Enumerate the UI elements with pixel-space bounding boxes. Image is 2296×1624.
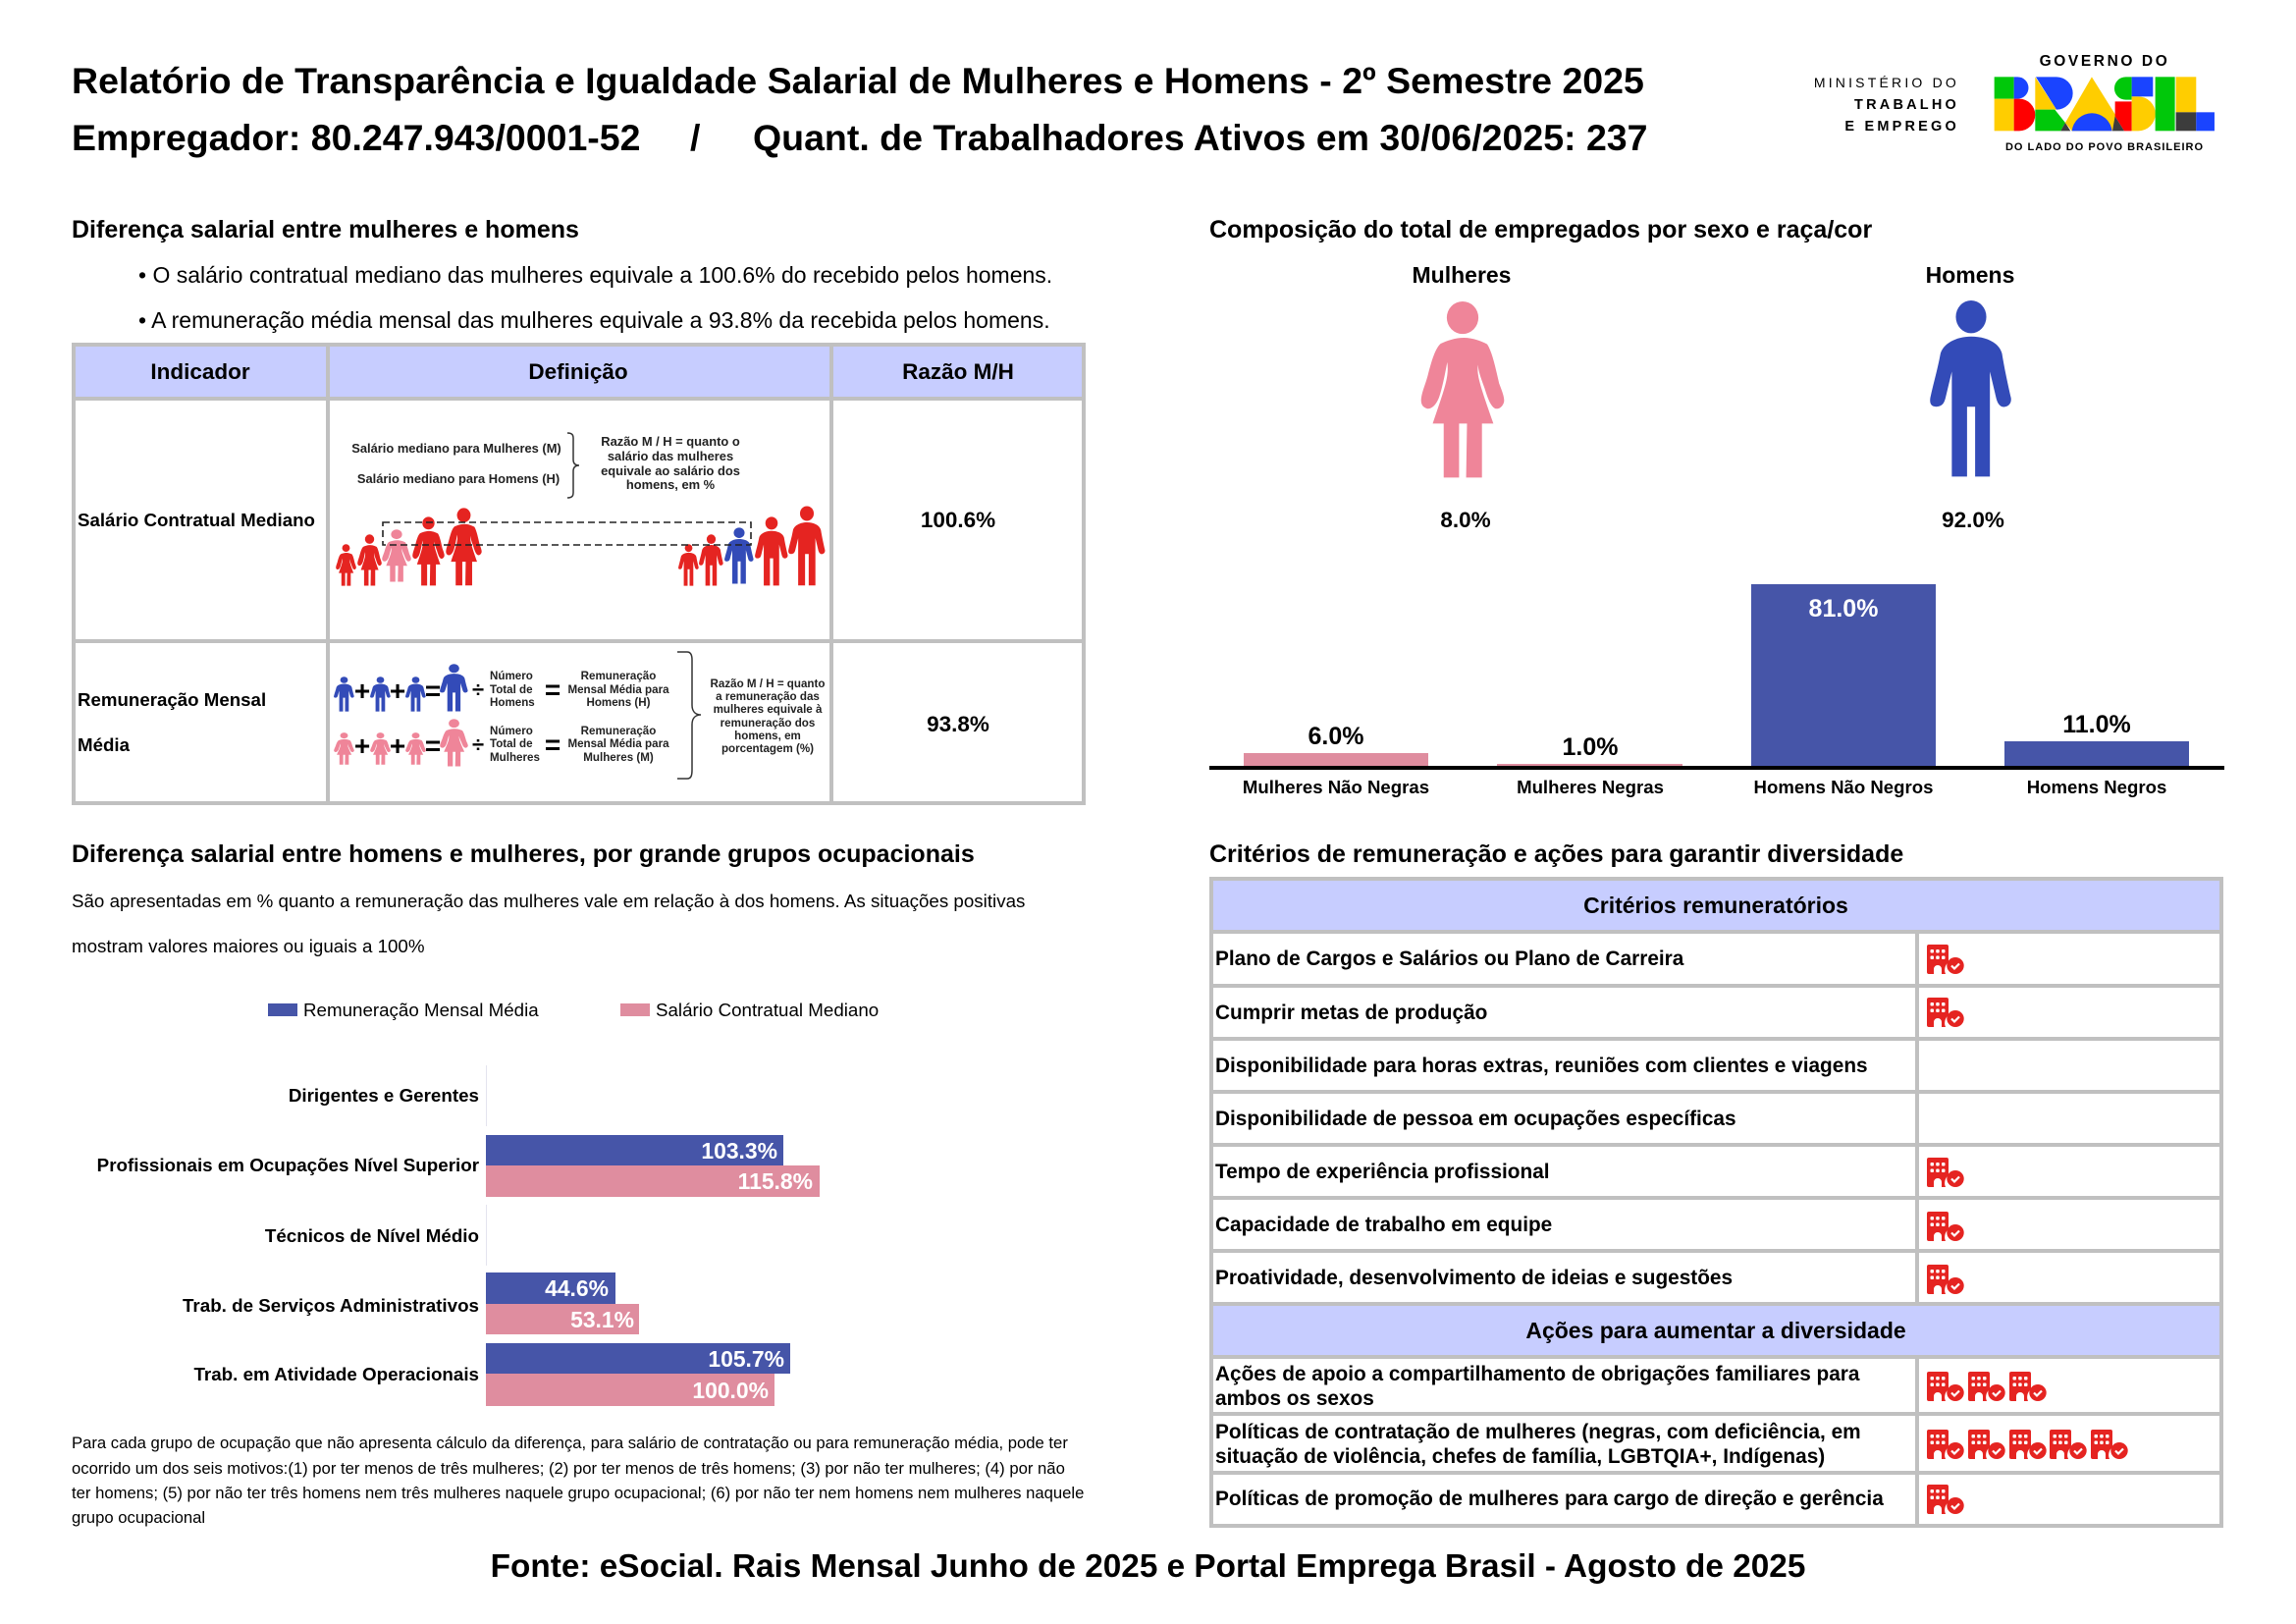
criteria labels: Cumprir metas de produção [1215, 1001, 1487, 1024]
diagram: average pay: = [545, 675, 561, 705]
bar chart: occupational groups: 115.8% [738, 1168, 813, 1194]
bar chart: occupational groups: 44.6% [545, 1275, 609, 1301]
text block: occupational intro: São apresentadas em % quanto a remuneração das mulheres vale em relação à dos homens. As situações positivas [72, 891, 1025, 911]
text block: footnote: ter homens; (5) por não ter três homens nem três mulheres naquele grupo ocupacional; (6) por não ter nem homens nem mulheres naquele [72, 1484, 1084, 1502]
diagram: average pay: + [390, 731, 405, 761]
table header: actions: Ações para aumentar a diversidade [1525, 1318, 1906, 1343]
logo: Governo do Brasil: DO LADO DO POVO BRASILEIRO [2005, 141, 2204, 153]
row labels: Salário Contratual Mediano [78, 510, 315, 530]
bar chart: occupational groups: Trab. de Serviços Administrativos [183, 1295, 479, 1316]
logo: Ministério do Trabalho e Emprego [1814, 75, 1959, 135]
diagram: average pay: Remuneração [581, 670, 656, 682]
text block: occupational intro [72, 891, 1025, 956]
heading: criteria: Critérios de remuneração e ações para garantir diversidade [1209, 840, 1903, 868]
text block: salary bullets [138, 262, 1052, 333]
diagram: average pay: = [425, 731, 441, 761]
logo: Ministério do Trabalho e Emprego: TRABALHO [1854, 97, 1959, 113]
row values: 100.6% [921, 508, 995, 532]
logo: Ministério do Trabalho e Emprego: MINISTÉRIO DO [1814, 75, 1959, 90]
heading: salary difference: Diferença salarial entre mulheres e homens [72, 216, 579, 244]
panel: women share [1413, 262, 1511, 532]
diagram: average pay: mulheres equivale à [714, 703, 823, 716]
panel: men share: Homens [1926, 262, 2014, 288]
criteria labels [1215, 947, 1868, 1289]
diagram: average pay: Total de [490, 683, 533, 696]
diagram: average pay: + [354, 676, 370, 706]
legend: Remuneração Mensal Média [303, 1000, 539, 1020]
bar chart: composition by sex and race: 11.0% [2062, 711, 2131, 738]
diagram: average pay: Mulheres (M) [583, 751, 654, 764]
table header: Indicador [150, 359, 250, 384]
title: Quant. de Trabalhadores Ativos em 30/06/2025: 237 [753, 117, 1648, 158]
action labels: ambos os sexos [1215, 1387, 1374, 1410]
diagram: median salary: homens, em % [626, 477, 716, 492]
criteria icons [1927, 945, 1964, 1294]
diagram: median salary: Salário mediano para Mulheres (M) [351, 441, 561, 456]
panel: men share: 92.0% [1942, 508, 2004, 532]
diagram: average pay: Mensal Média para [567, 737, 669, 750]
diagram: average pay: + [390, 676, 405, 706]
action labels: Ações de apoio a compartilhamento de obrigações familiares para [1215, 1363, 1860, 1385]
diagram: median salary: Razão M / H = quanto o [601, 434, 740, 449]
bar chart: occupational groups: Técnicos de Nível Médio [265, 1225, 479, 1246]
diagram: average pay: remuneração dos [721, 717, 815, 730]
diagram: average pay: = [545, 730, 561, 760]
diagram: average pay [334, 652, 825, 779]
diagram: average pay: Total de [490, 737, 533, 750]
diagram: average pay: ÷ [472, 732, 484, 757]
diagram: average pay: = [425, 676, 441, 706]
action labels: Políticas de contratação de mulheres (negras, com deficiência, em [1215, 1421, 1861, 1443]
panel: criteria table [1209, 877, 2223, 1528]
criteria labels: Disponibilidade de pessoa em ocupações específicas [1215, 1108, 1736, 1130]
panel: indicator table [72, 343, 1086, 805]
bar chart: occupational groups: 53.1% [570, 1307, 634, 1332]
diagram: average pay: a remuneração das [716, 690, 820, 703]
row labels: Remuneração Mensal [78, 689, 266, 710]
row labels [78, 510, 315, 755]
panel: women share: Mulheres [1413, 262, 1511, 288]
bar chart: composition by sex and race: 6.0% [1308, 723, 1363, 750]
bar chart: occupational groups [97, 1065, 820, 1406]
criteria labels: Proatividade, desenvolvimento de ideias e sugestões [1215, 1267, 1733, 1289]
criteria labels: Disponibilidade para horas extras, reuniões com clientes e viagens [1215, 1055, 1868, 1077]
logo: Ministério do Trabalho e Emprego: E EMPREGO [1844, 119, 1959, 135]
bar chart: composition by sex and race: 81.0% [1809, 595, 1878, 623]
action icons [1927, 1372, 2128, 1514]
diagram: median salary [336, 433, 825, 586]
legend [268, 1000, 879, 1020]
bar chart: composition by sex and race: Homens Não Negros [1754, 777, 1933, 797]
table header: Razão M/H [902, 359, 1014, 384]
bar chart: composition by sex and race: Mulheres Não Negras [1243, 777, 1429, 797]
bar chart: occupational groups: 105.7% [708, 1346, 784, 1372]
panel: women share: 8.0% [1440, 508, 1491, 532]
bar chart: occupational groups: 100.0% [692, 1378, 769, 1403]
text block: occupational intro: mostram valores maiores ou iguais a 100% [72, 936, 425, 956]
bar chart: composition by sex and race: Homens Negros [2027, 777, 2166, 797]
title: / [690, 117, 701, 158]
criteria labels: Tempo de experiência profissional [1215, 1161, 1550, 1183]
title: Empregador: 80.247.943/0001-52 [72, 117, 641, 158]
text block: salary bullets: • A remuneração média mensal das mulheres equivale a 93.8% da recebida pelos homens. [138, 307, 1050, 333]
bar chart: occupational groups: Trab. em Atividade Operacionais [193, 1364, 479, 1384]
diagram: average pay: porcentagem (%) [721, 742, 814, 755]
table header [150, 359, 1014, 384]
diagram: average pay: Remuneração [581, 725, 656, 737]
icon: woman [1421, 301, 1504, 477]
footer source: Fonte: eSocial. Rais Mensal Junho de 2025 e Portal Emprega Brasil - Agosto de 2025 [491, 1548, 1805, 1585]
diagram: average pay: Homens (H) [586, 696, 651, 709]
criteria labels: Capacidade de trabalho em equipe [1215, 1214, 1552, 1236]
text block: footnote [72, 1434, 1084, 1527]
action labels: situação de violência, chefes de família, LGBTQIA+, Indígenas) [1215, 1445, 1825, 1468]
diagram: average pay: Mensal Média para [567, 683, 669, 696]
text block: footnote: Para cada grupo de ocupação que não apresenta cálculo da diferença, para salário de contratação ou para remuneração média, pode ter [72, 1434, 1068, 1452]
diagram: average pay: Número [490, 670, 533, 682]
criteria labels: Plano de Cargos e Salários ou Plano de Carreira [1215, 947, 1684, 970]
text block: salary bullets: • O salário contratual mediano das mulheres equivale a 100.6% do recebido pelos homens. [138, 262, 1052, 288]
diagram: average pay: ÷ [472, 677, 484, 702]
bar chart: composition by sex and race [1209, 584, 2224, 797]
row values [921, 508, 995, 736]
row values: 93.8% [927, 712, 989, 736]
bar chart: occupational groups: Profissionais em Ocupações Nível Superior [97, 1155, 480, 1175]
diagram: average pay: homens, em [734, 730, 801, 742]
logo: Governo do Brasil [1995, 53, 2215, 153]
heading: occupational groups: Diferença salarial entre homens e mulheres, por grande grupos ocupacionais [72, 840, 975, 868]
diagram: median salary: salário das mulheres [608, 449, 733, 463]
diagram: average pay: + [354, 731, 370, 761]
title: Relatório de Transparência e Igualdade Salarial de Mulheres e Homens - 2º Semestre 2025 [72, 60, 1644, 101]
table header: Definição [528, 359, 628, 384]
diagram: median salary: Salário mediano para Homens (H) [357, 471, 560, 486]
title [72, 60, 1648, 158]
diagram: average pay: Mulheres [490, 751, 540, 764]
bar chart: occupational groups: 103.3% [701, 1138, 777, 1164]
bar chart: composition by sex and race: 1.0% [1563, 733, 1618, 761]
diagram: average pay: Homens [490, 696, 535, 709]
diagram: median salary: equivale ao salário dos [601, 463, 740, 478]
bar chart: occupational groups: Dirigentes e Gerentes [289, 1085, 479, 1106]
row labels: Média [78, 734, 131, 755]
icon: man [1930, 300, 2011, 476]
text block: footnote: grupo ocupacional [72, 1508, 205, 1527]
bar chart: composition by sex and race: Mulheres Negras [1517, 777, 1664, 797]
logo: Governo do Brasil: GOVERNO DO [2040, 53, 2169, 70]
text block: footnote: ocorrido um dos seis motivos:(1) por ter menos de três mulheres; (2) por ter menos de três homens; (3) por não ter mulheres; (4) por não [72, 1459, 1065, 1478]
table header: criteria: Critérios remuneratórios [1583, 893, 1848, 918]
action labels: Políticas de promoção de mulheres para cargo de direção e gerência [1215, 1488, 1884, 1510]
diagram: average pay: Número [490, 725, 533, 737]
panel: men share [1926, 262, 2014, 532]
legend: Salário Contratual Mediano [656, 1000, 879, 1020]
heading: composition: Composição do total de empregados por sexo e raça/cor [1209, 216, 1872, 244]
action labels [1215, 1363, 1884, 1510]
diagram: average pay: Razão M / H = quanto [711, 677, 825, 690]
